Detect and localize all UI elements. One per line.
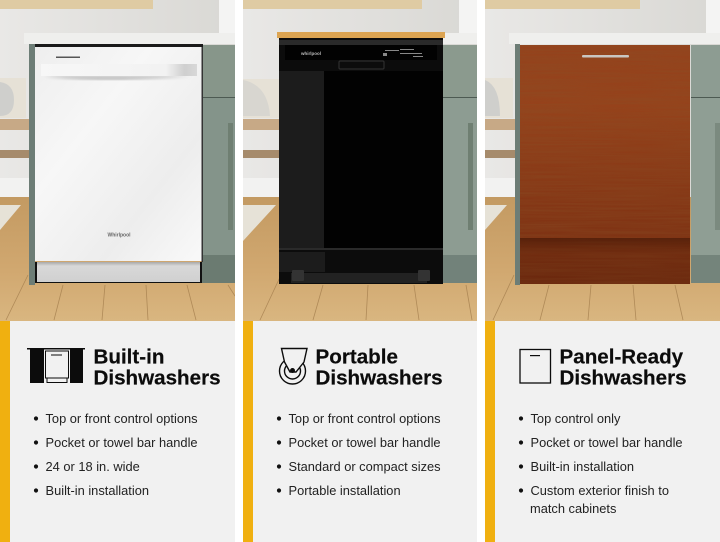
list: built-in features: Pocket or towel bar handle [46,435,198,450]
list: portable features: Top or front control options [288,411,441,426]
panel: built-in dishwasher photo: Whirlpool [107,232,131,238]
heading: panel-ready: Panel-Ready [560,346,683,368]
heading: panel-ready: Dishwashers [560,366,687,390]
list: portable features: Pocket or towel bar handle [288,435,441,450]
icon: panel-ready door [520,350,550,383]
panel: portable info card [243,321,477,542]
list: panel-ready features: match cabinets [530,501,616,516]
panel: portable dishwasher photo [243,0,477,321]
list: portable features: Standard or compact sizes [288,459,441,474]
panel: panel-ready info card [485,321,720,542]
panel: panel-ready dishwasher photo [485,0,720,321]
list: portable features: Portable installation [288,483,401,498]
list: built-in features: 24 or 18 in. wide [46,459,140,474]
heading: portable: Dishwashers [316,366,443,390]
heading: portable: Portable [316,346,398,368]
panel: built-in dishwasher photo [0,0,235,321]
list: panel-ready features: Custom exterior finish to [530,483,669,498]
list: built-in features: Built-in installation [46,483,149,498]
list: portable features [277,411,441,498]
heading: built-in: Dishwashers [94,366,221,390]
list: panel-ready features [519,411,683,516]
list: panel-ready features: Built-in installation [530,459,634,474]
list: built-in features: Top or front control options [46,411,198,426]
panel: portable dishwasher photo: whirlpool [300,51,321,56]
list: panel-ready features: Top control only [530,411,621,426]
icon: built-in dishwasher between cabinets [27,348,85,383]
icon: caster wheel [280,348,307,384]
heading: built-in: Built-in [94,346,164,368]
list: built-in features [34,411,198,498]
list: panel-ready features: Pocket or towel bar handle [530,435,683,450]
panel: built-in info card [0,321,235,542]
